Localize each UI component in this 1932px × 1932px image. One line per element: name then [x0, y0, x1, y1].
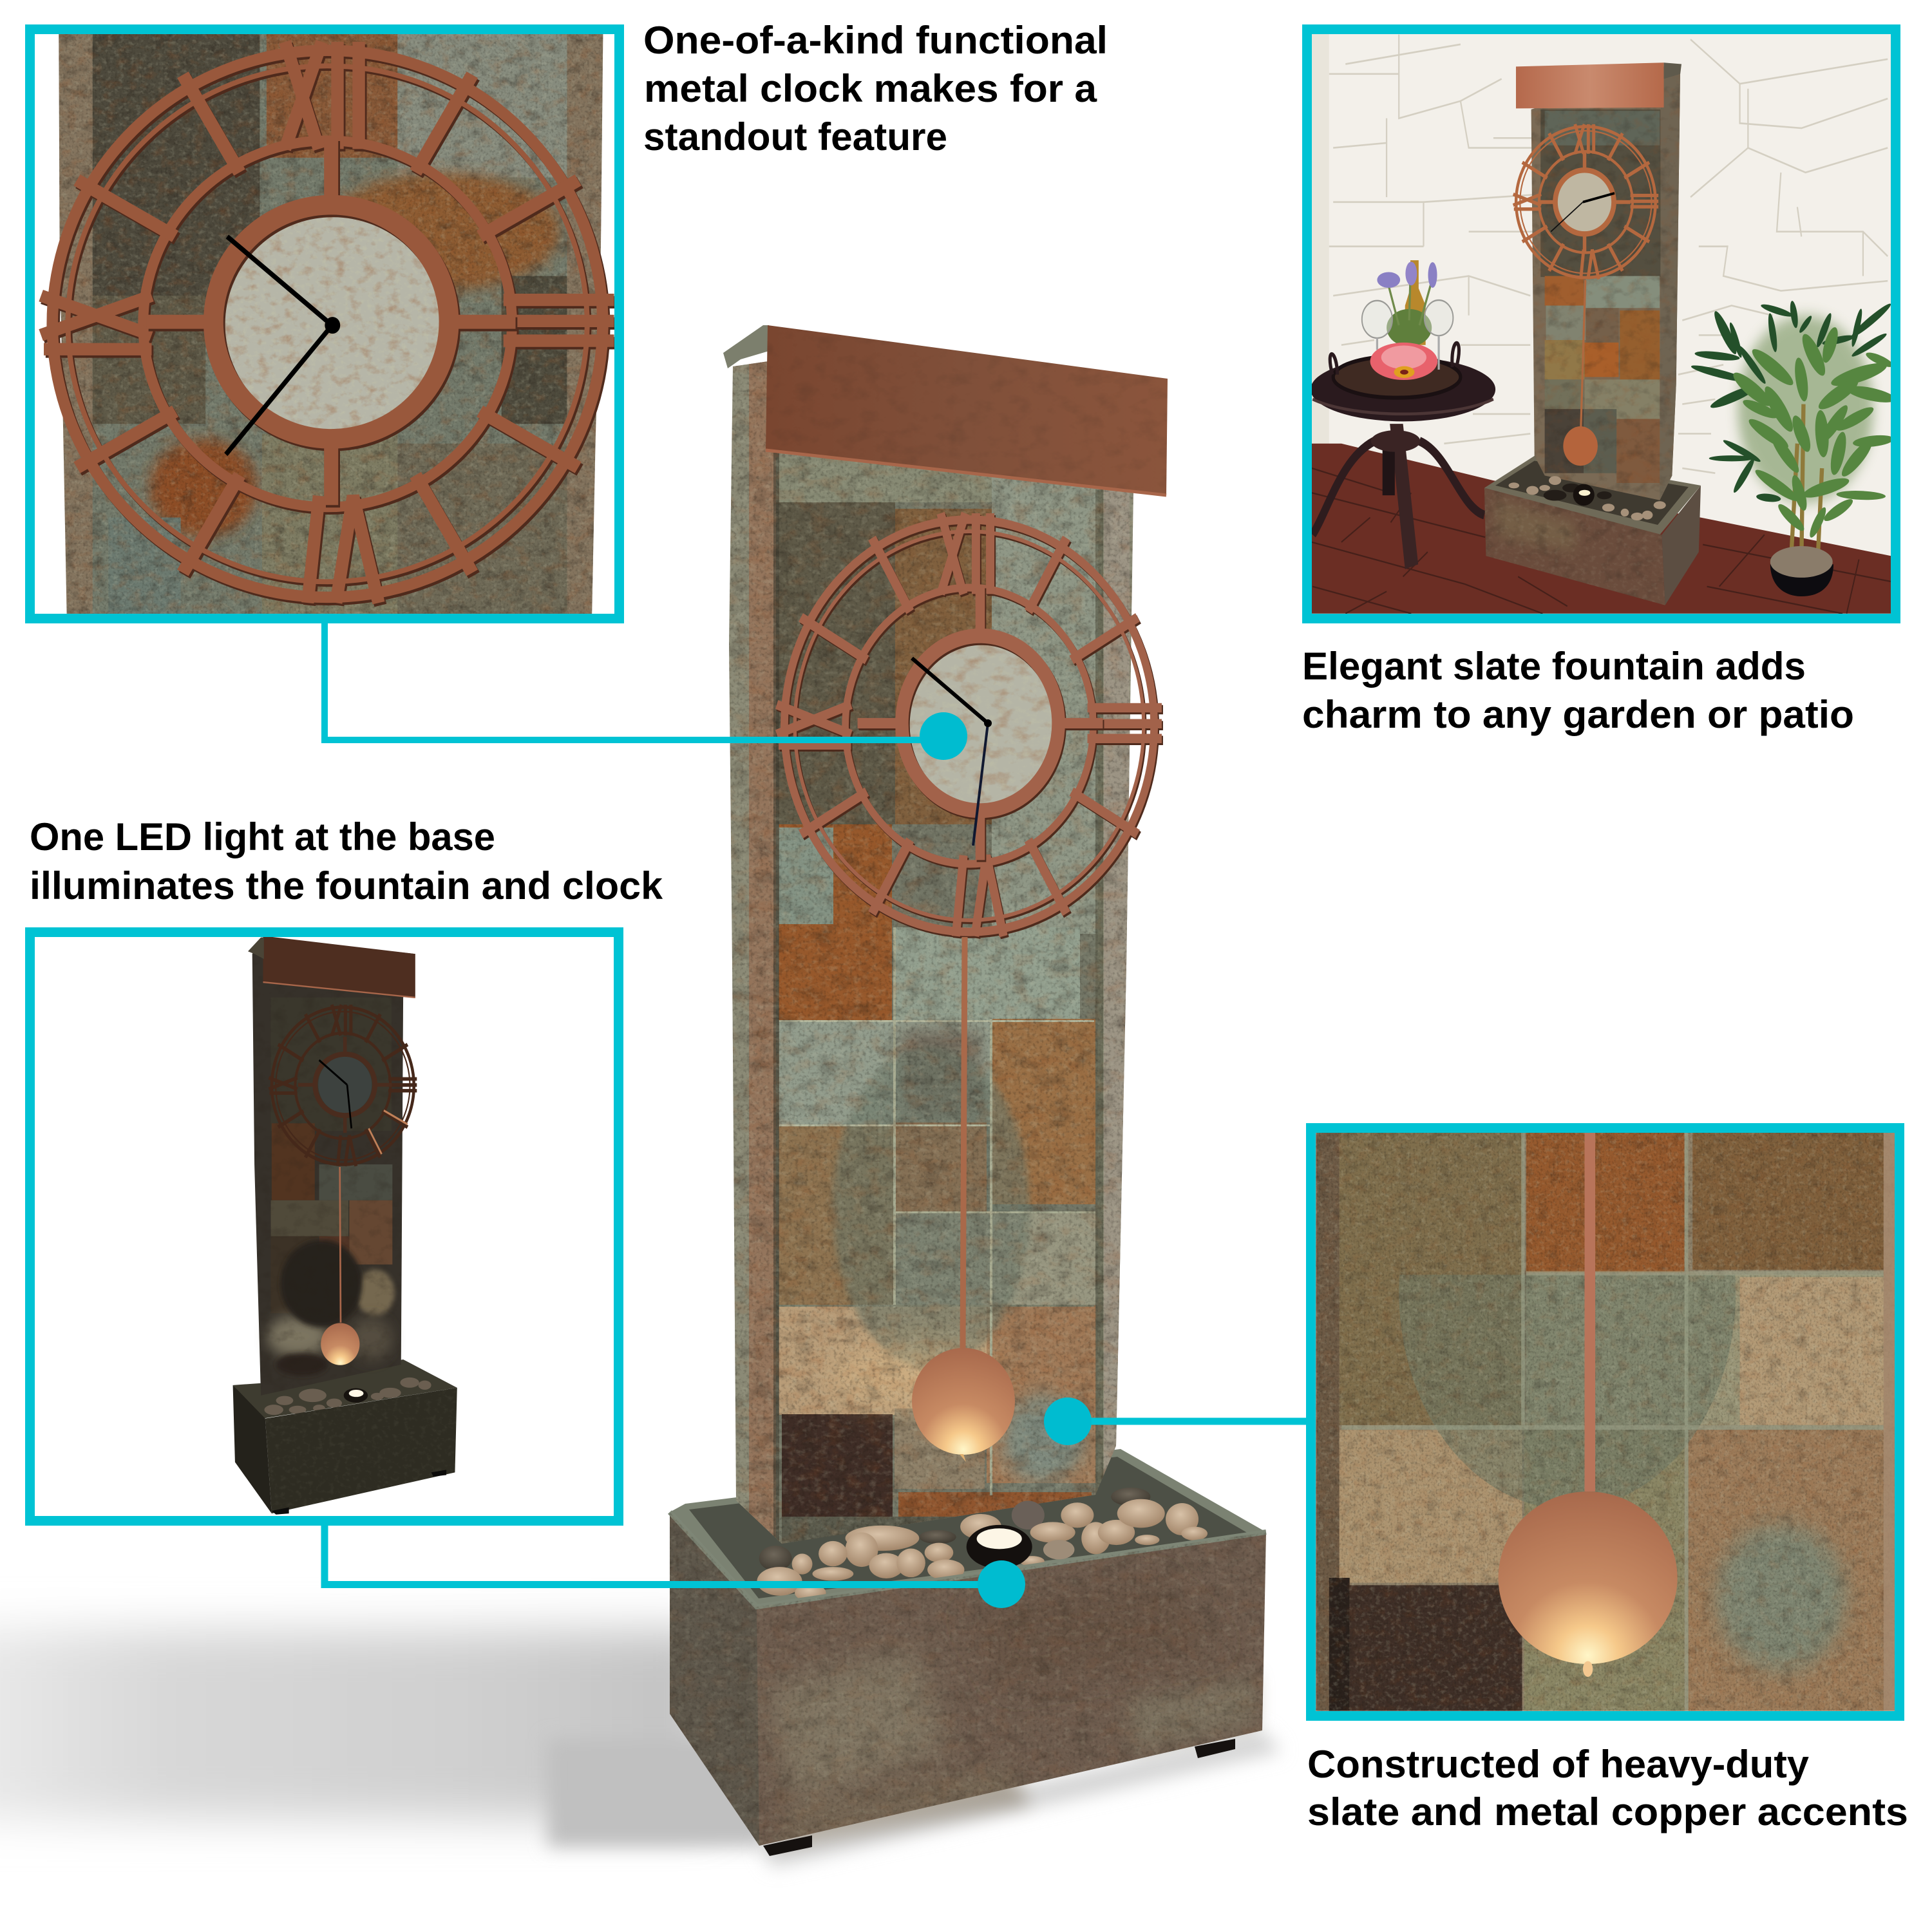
text: clock feature: [643, 19, 1108, 158]
text: LED light feature: One LED light at the base: [30, 815, 495, 858]
dark clock: [269, 1005, 417, 1166]
text: LED light feature: illuminates the fountain and clock: [30, 864, 663, 907]
bamboo plant in pot: [1690, 300, 1897, 596]
rubber feet: [763, 1739, 1235, 1856]
text: clock feature: standout feature: [643, 115, 947, 158]
metal roman numeral clock: [777, 513, 1163, 938]
text: clock feature: One-of-a-kind functional: [643, 19, 1108, 62]
white brick wall: [1309, 30, 1896, 572]
clock face: [222, 214, 440, 430]
callout connector: clock: [325, 623, 967, 760]
panel: slate and copper close-up: [1311, 1075, 1900, 1716]
copper rod and pendulum bob: [1499, 1133, 1678, 1677]
river pebbles and LED light: [757, 1488, 1208, 1602]
dark column: [233, 936, 457, 1419]
text: garden and patio feature: [1302, 645, 1854, 736]
callout connector: slate close-up: [1044, 1397, 1307, 1445]
brick floor: [1312, 444, 1891, 614]
panel: clock close-up: [30, 30, 620, 621]
patio table: [1311, 343, 1495, 569]
text: LED light feature: [30, 815, 663, 907]
main product: slate clock fountain: [670, 325, 1266, 1856]
panel: fountain lit at night: [30, 933, 618, 1521]
table flower, bottle and glasses: [1362, 260, 1453, 380]
copper top cap: [766, 325, 1168, 495]
slate backdrop: [59, 30, 603, 621]
dark basin with pebbles: [233, 1378, 457, 1515]
glowing pendulum: [321, 1167, 359, 1365]
panel: patio lifestyle scene: [1307, 30, 1897, 618]
text: garden and patio feature: Elegant slate fountain adds: [1302, 645, 1806, 688]
text: garden and patio feature: charm to any garden or patio: [1302, 693, 1854, 736]
callout connector: LED light: [325, 1526, 1025, 1608]
pendulum: [912, 937, 1015, 1462]
lifestyle fountain: [1484, 62, 1701, 605]
background: floor shadow: [0, 1629, 1282, 1868]
copper clock frame: [41, 42, 616, 605]
basin rim and interior: [670, 1449, 1266, 1607]
text: construction feature: Constructed of heavy-duty: [1307, 1743, 1810, 1786]
slate tile wall: [1316, 1075, 1895, 1711]
clock hands: [226, 236, 340, 455]
basin front and side: [670, 1512, 1266, 1848]
text: clock feature: metal clock makes for a: [644, 67, 1097, 110]
text: construction feature: [1307, 1743, 1908, 1833]
text: construction feature: slate and metal copper accents: [1307, 1790, 1908, 1833]
slate column with tile wall: [723, 325, 1133, 1552]
